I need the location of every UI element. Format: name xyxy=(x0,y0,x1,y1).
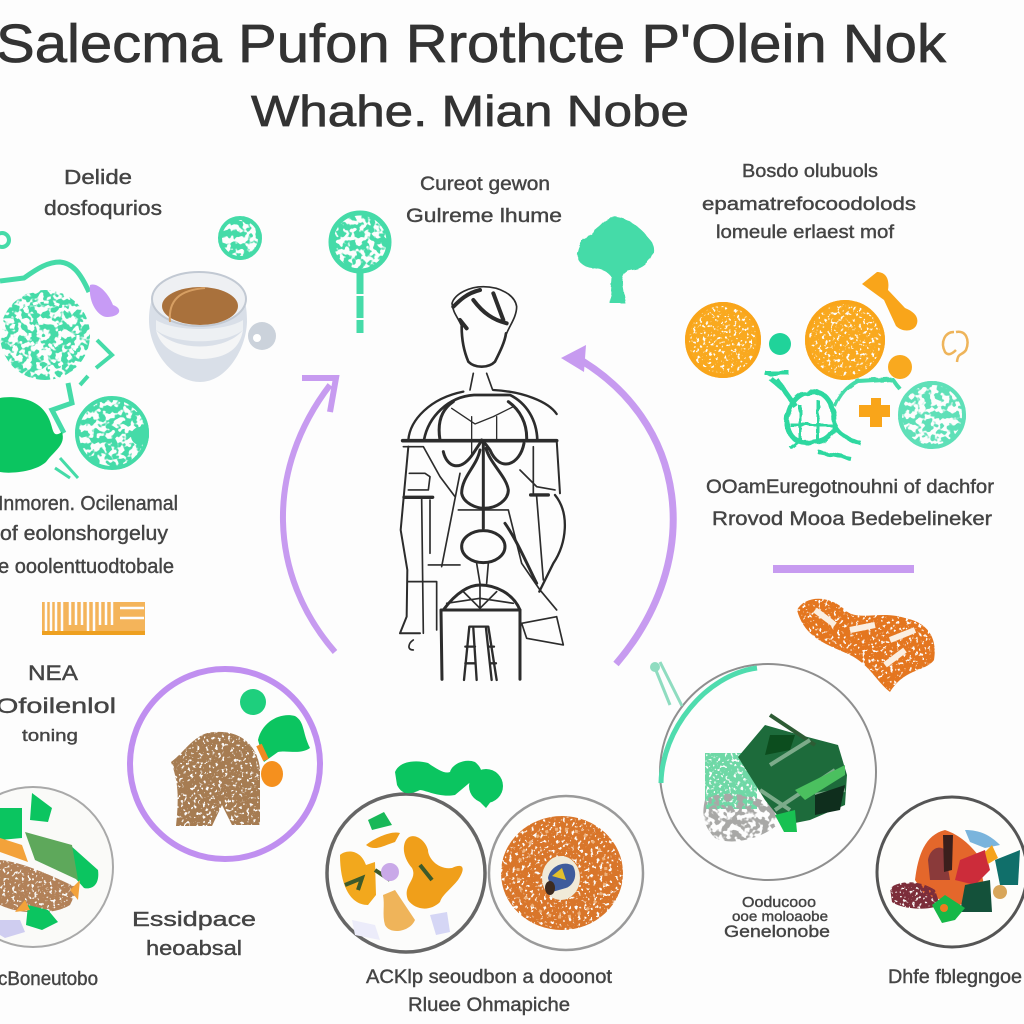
icon: green vegetables xyxy=(395,761,503,808)
text block: top right label: Bosdo olubuols xyxy=(742,161,878,181)
text block: left middle label: of eolonshorgeluy xyxy=(0,523,168,545)
text block: lower right caption xyxy=(724,894,830,941)
text block: bottom centre caption: ACKlp seoudbon a dooonot xyxy=(366,967,613,988)
text block: lower right caption: Ooducooo xyxy=(742,894,816,911)
text block: lower left label: NEA xyxy=(28,662,78,685)
text block: left middle label xyxy=(0,493,178,578)
figure: left arm xyxy=(400,447,460,650)
text block: top centre label xyxy=(406,174,562,227)
text block: bottom centre caption: Rluee Ohmapiche xyxy=(408,995,570,1016)
text block: bottom left caption: cBoneutobo xyxy=(0,969,98,990)
text block: top right label xyxy=(702,161,916,242)
text block: lower right caption: ooe moloaobe xyxy=(732,908,828,924)
figure: torso and chest xyxy=(403,390,557,590)
text block: lower left label xyxy=(0,662,116,745)
text block: top left label: Delide xyxy=(64,167,132,189)
title: Salecma Pufon Rrothcte P'Olein Nok xyxy=(0,14,947,74)
human figure xyxy=(400,287,565,680)
text block: essence label: heoabsal xyxy=(146,938,242,960)
icon: orange barcode legend xyxy=(42,602,145,635)
text block: top right label: epamatrefocoodolods xyxy=(702,194,916,214)
figure: pelvis and legs xyxy=(441,585,520,680)
text block: top centre label: Gulreme lhume xyxy=(406,206,562,227)
icon: orange and green food cluster xyxy=(685,272,968,458)
text block: top left label: dosfoqurios xyxy=(44,198,162,220)
text block: essence label: Essidpace xyxy=(132,909,256,931)
text block: top centre label: Cureot gewon xyxy=(420,174,550,195)
icon: orange food xyxy=(797,599,935,692)
text block: essence label xyxy=(132,909,256,960)
text block: right middle label: OOamEuregotnouhni of dachfor xyxy=(706,477,995,498)
divider bar: purple xyxy=(773,565,914,573)
text block: right middle label xyxy=(706,477,995,530)
text block: left middle label: e ooolenttuodtobale xyxy=(0,556,174,578)
panel: right large plate xyxy=(650,662,876,880)
text block: bottom right caption: Dhfe fblegngoe xyxy=(888,967,1022,988)
figure: head and hair xyxy=(452,287,517,390)
icon: coffee cup xyxy=(149,272,276,382)
arrows: purple cycle xyxy=(283,345,673,664)
text block: bottom centre caption xyxy=(366,967,613,1016)
text block: right middle label: Rrovod Mooa Bedebelineker xyxy=(712,509,993,530)
text block: top left label xyxy=(44,167,162,220)
figure: right arm xyxy=(520,440,565,645)
subtitle: Whahe. Mian Nobe xyxy=(251,87,689,136)
panel: bread circle xyxy=(130,669,320,859)
text block: lower right caption: Genelonobe xyxy=(724,922,830,941)
text block: left middle label: Inmoren. Ocilenamal xyxy=(0,493,178,515)
icon: green tree xyxy=(577,218,654,304)
panel: centre right plate xyxy=(489,796,643,950)
icon: green food cluster top left xyxy=(0,216,262,478)
panel: lower left plate xyxy=(0,787,113,947)
icon: green magnifier xyxy=(330,212,390,333)
panel: centre left plate xyxy=(327,794,485,952)
text block: top right label: lomeule erlaest mof xyxy=(716,222,895,242)
panel: right lower plate xyxy=(877,797,1024,947)
text block: lower left label: toning xyxy=(22,726,78,745)
